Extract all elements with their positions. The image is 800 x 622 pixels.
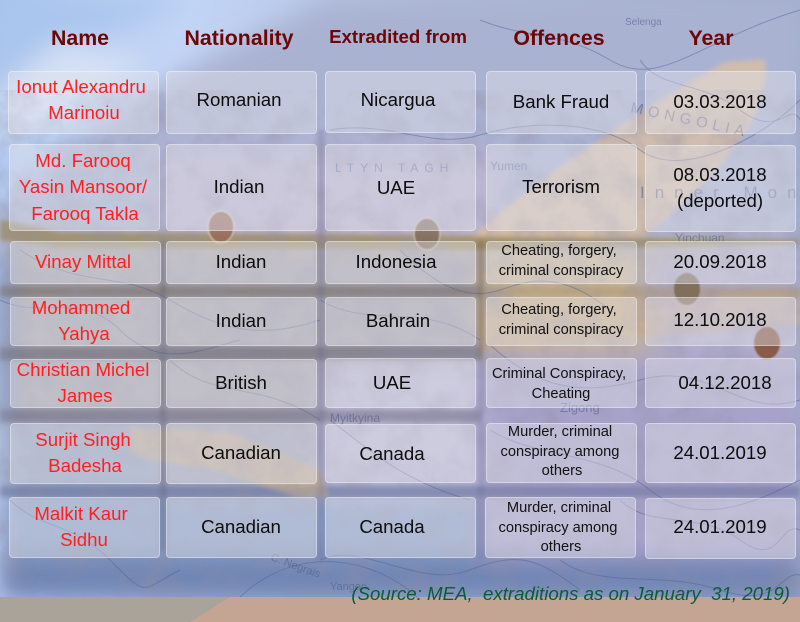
year: 24.01.2019: 24.01.2019 [673,516,767,537]
nationality: Romanian: Romanian [196,89,282,110]
nationality: Canadian: Canadian [201,442,281,463]
year: 24.01.2019: 24.01.2019 [673,442,767,463]
map label: Yangon [330,581,367,593]
dark band [0,346,480,360]
year: 20.09.2018: 20.09.2018 [673,251,767,272]
row 2 extradited cell [325,144,476,231]
row 5 nationality cell [166,359,317,408]
row 6 year cell [645,423,796,483]
nationality: British: British [215,372,267,393]
extradited from: Nicargua: Nicargua [361,89,435,110]
nationality: Indian: Indian [214,176,264,197]
heading: Extradited from: Extradited from [329,26,467,47]
name: Christian Michel: Christian Michel [17,359,149,380]
row 7 extradited cell [325,497,476,558]
offence row 3 line 1: Cheating, forgery, [501,243,617,259]
name: Md. Farooq: Md. Farooq [35,150,131,171]
name line 2: James [58,385,112,406]
row 7 offence cell [485,497,636,558]
wing upper right [470,59,766,240]
year: 04.12.2018: 04.12.2018 [678,372,772,393]
row 1 extradited cell [325,71,476,133]
bottom band [0,597,800,622]
year: 08.03.2018: 08.03.2018 [673,164,767,185]
extradited from: Bahrain: Bahrain [366,310,430,331]
map label: MONGOLIA [629,99,751,141]
row 7 name cell [9,497,160,558]
row 2 offence cell [486,144,637,231]
row 3 name cell [10,241,161,284]
row 2 year cell [645,145,796,232]
name line 2: Badesha [48,455,122,476]
year: 03.03.2018: 03.03.2018 [673,91,767,112]
offence row 5 line 2: Cheating [532,386,590,402]
offence row 7 line 2: conspiracy among [499,520,617,536]
name line 2: Marinoiu [48,102,120,123]
name: Vinay Mittal: Vinay Mittal [35,251,131,272]
row 7 nationality cell [166,497,317,558]
source note: (Source: MEA, extraditions as on January 31, 2019) [351,583,790,604]
map label: Selenga [625,17,662,28]
lower wing [130,428,328,497]
row 7 year cell [645,498,796,559]
offence row 4 line 2: criminal conspiracy [499,322,623,338]
airplane windows [208,211,780,359]
heading: Year: Year [688,26,734,50]
name line 2: Yahya [58,323,110,344]
offence row 7 line 3: others [541,539,581,555]
row 2 nationality cell [166,144,317,231]
vertical gaps [160,240,166,550]
name line 2: Sidhu [60,529,108,550]
heading: Nationality: Nationality [184,26,294,50]
year note: deported: (deported) [677,190,763,211]
nationality: Indian: Indian [216,310,266,331]
extradited from: Canada: Canada [359,443,425,464]
name line 2: Yasin Mansoor/ [19,176,147,197]
row 4 extradited cell [325,297,476,346]
name: Ionut Alexandru Marinoiu: Ionut Alexandru [16,76,146,97]
extradited from: UAE: UAE [373,372,411,393]
extradited from: UAE: UAE [377,177,415,198]
row 4 name cell [10,297,161,346]
offence row 7 line 1: Murder, criminal [507,500,611,516]
row 5 extradited cell [325,358,476,408]
heading: Name: Name [51,26,109,50]
row 4 year cell [645,297,796,346]
map label: Myitkyina [330,411,380,425]
offence row 5 line 1: Criminal Conspiracy, [492,366,626,382]
offence: Terrorism: Terrorism [522,176,600,197]
nationality: Canadian: Canadian [201,516,281,537]
row 1 name cell [8,71,159,134]
map label: LTYN TAGH [335,161,454,175]
row 1 offence cell [486,71,637,134]
offence row 6 line 2: conspiracy among [501,444,619,460]
fuselage band [0,219,800,250]
offence: Bank Fraud: Bank Fraud [513,91,609,112]
name: Mohammed: Mohammed [32,297,130,318]
row 3 nationality cell [166,241,317,284]
offence row 6 line 1: Murder, criminal [508,424,612,440]
row 4 offence cell [486,297,637,346]
map label: C. Negrais [269,552,322,581]
row 5 year cell [645,358,796,408]
row 6 name cell [10,423,161,484]
row 6 nationality cell [166,423,317,484]
row 6 extradited cell [325,424,476,483]
name: Malkit Kaur: Malkit Kaur [34,503,128,524]
row 2 name cell [9,144,160,231]
extradited from: Canada: Canada [359,516,425,537]
map label: Yumen [490,159,527,173]
nationality: Indian: Indian [216,251,266,272]
row 3 extradited cell [325,241,476,284]
row 5 offence cell [486,358,637,408]
heading: Offences: Offences [513,26,605,50]
offence row 3 line 2: criminal conspiracy [499,263,623,279]
row 6 offence cell [486,423,637,483]
map label: Zigong [560,400,600,415]
row 3 offence cell [486,241,637,284]
year: 12.10.2018: 12.10.2018 [673,309,767,330]
row 1 nationality cell [166,71,317,134]
name line 3: Farooq Takla [31,203,139,224]
offence row 6 line 3: others [542,463,582,479]
extradited from: Indonesia: Indonesia [356,251,436,272]
row 1 year cell [645,71,796,134]
map label: Yinchuan [675,231,725,245]
name: Surjit Singh: Surjit Singh [35,429,131,450]
row 4 nationality cell [166,297,317,346]
row 5 name cell [10,359,161,408]
row 3 year cell [645,241,796,284]
offence row 4 line 1: Cheating, forgery, [501,302,617,318]
